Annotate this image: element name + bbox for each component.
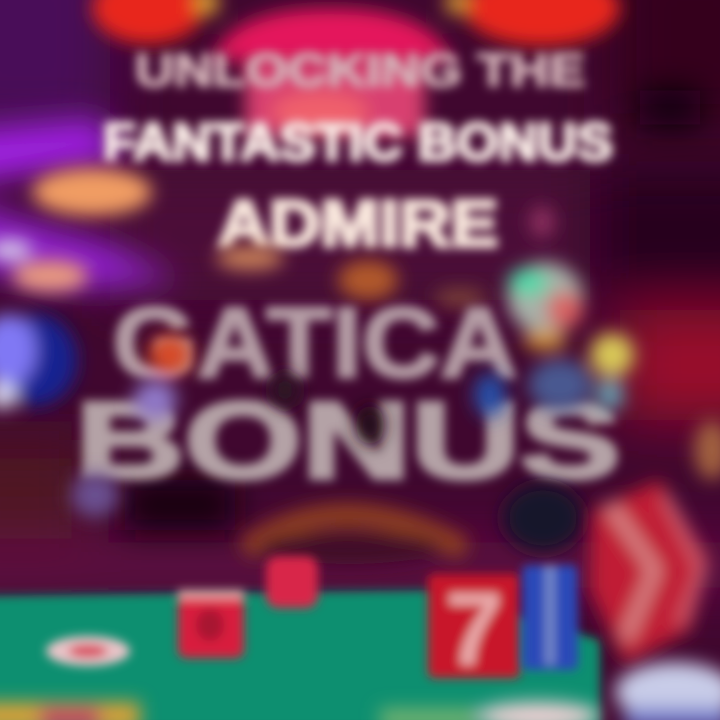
top red ornaments bbox=[92, 0, 620, 136]
heading: bold line: FANTASTIC BONUS bbox=[103, 113, 613, 171]
purple light streaks bbox=[0, 118, 180, 290]
heading: large line one: GATICA bbox=[112, 287, 518, 399]
blue card bbox=[522, 565, 578, 670]
heading: large line two: BONUS bbox=[76, 379, 620, 502]
heading: small top line: UNLOCKING THE bbox=[135, 44, 585, 96]
white chip on table bbox=[46, 636, 130, 666]
red cup centre bbox=[266, 556, 318, 608]
green table bbox=[0, 590, 600, 720]
colourful confetti cluster bbox=[71, 262, 634, 517]
red lucky seven card: 7 bbox=[445, 572, 503, 688]
bottom decorations bbox=[0, 662, 720, 720]
red lucky seven card bbox=[428, 572, 520, 688]
icon: blue glow orb bbox=[0, 314, 77, 409]
heading: third line: ADMIRE bbox=[218, 186, 498, 260]
dark ball bbox=[503, 484, 583, 552]
red cup left bbox=[178, 590, 244, 658]
decorative orange blobs bbox=[0, 168, 554, 308]
large red die bbox=[590, 420, 720, 665]
roulette wheel arc bbox=[245, 515, 465, 564]
